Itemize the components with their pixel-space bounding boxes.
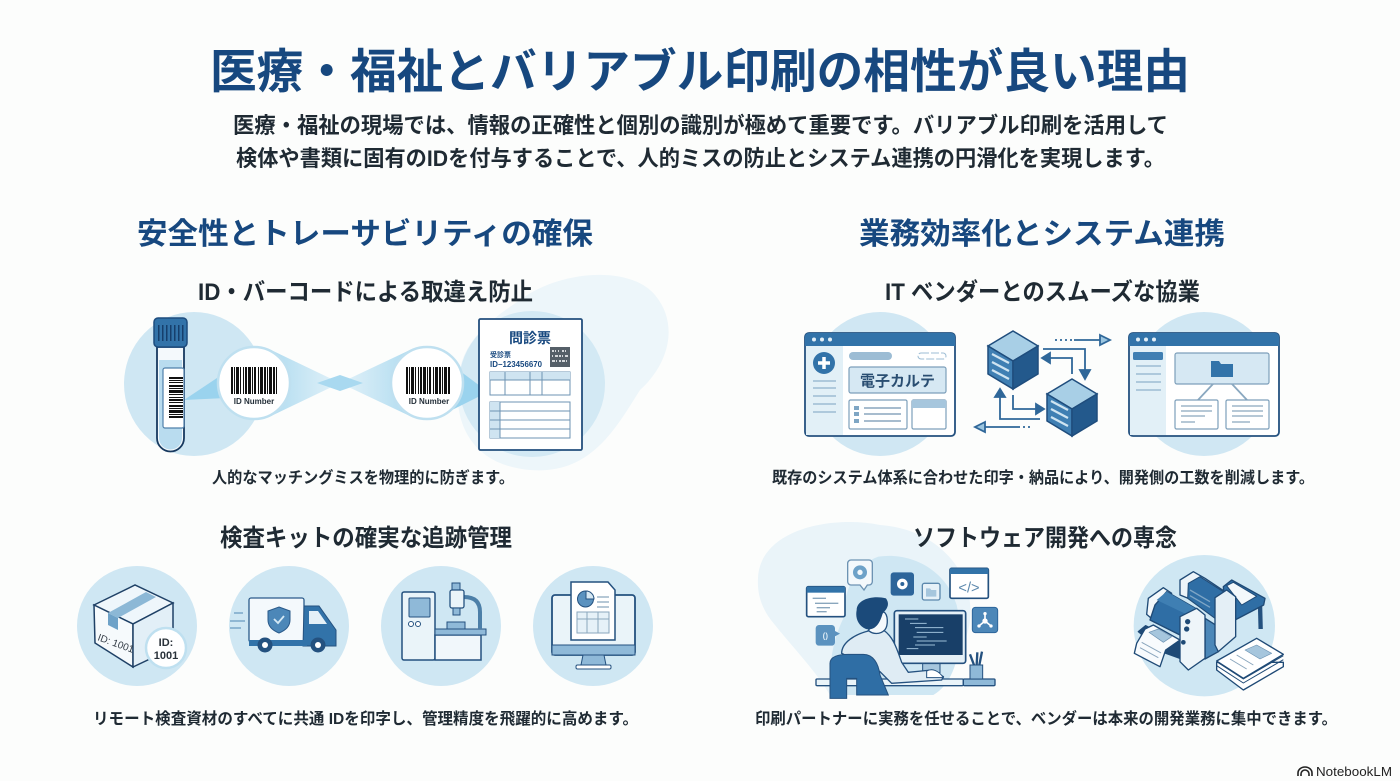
- subheading: test kit: 検査キットの確実な追跡管理: [220, 525, 512, 552]
- icon: questionnaire: 受診票: [490, 350, 511, 359]
- subheading: IT vendor: IT ベンダーとのスムーズな協業: [885, 278, 1200, 306]
- callout: barcode left: ID Number: [234, 397, 274, 406]
- illustration: developer: (): [823, 632, 828, 641]
- subheading: ID barcode: ID・バーコードによる取違え防止: [198, 279, 533, 306]
- callout: barcode left: [218, 347, 290, 419]
- illustration: developer: [807, 556, 998, 698]
- background blobs: [124, 275, 669, 470]
- panel: test kit tracking: [77, 525, 653, 728]
- intro text: [233, 113, 1168, 171]
- illustration: developer: </>: [958, 580, 980, 596]
- icon: delivery truck: [229, 566, 349, 686]
- heading: right column: 業務効率化とシステム連携: [859, 218, 1225, 251]
- background blob: developer: [758, 522, 971, 695]
- window: file system: [1129, 333, 1279, 436]
- window: electronic chart: 電子カルテ: [860, 373, 935, 390]
- intro text: 医療・福祉の現場では、情報の正確性と個別の識別が極めて重要です。バリアブル印刷を活用して: [233, 113, 1168, 138]
- background circles: [810, 312, 1274, 456]
- caption: software focus: 印刷パートナーに実務を任せることで、ベンダーは本来の開発業務に集中できます。: [755, 709, 1337, 728]
- logo: NotebookLM: NotebookLM: [1316, 764, 1392, 779]
- icon: analysis machine: [381, 566, 501, 686]
- icon: questionnaire: ID−123456670: [490, 360, 543, 369]
- panel: ID barcode: [124, 275, 669, 487]
- icon: data servers: [988, 331, 1097, 436]
- window: electronic chart: [805, 333, 955, 436]
- icon: package: ID: 1001: [96, 632, 136, 656]
- callout: barcode right: ID Number: [409, 397, 449, 406]
- icon: package: [77, 566, 197, 686]
- icon: test tube: [154, 318, 187, 452]
- light beams: [184, 349, 488, 417]
- icon: questionnaire: [479, 319, 582, 450]
- callout: barcode right: [391, 347, 463, 419]
- caption: IT vendor: 既存のシステム体系に合わせた印字・納品により、開発側の工数を削減します。: [772, 468, 1314, 487]
- panel: software focus: [755, 522, 1337, 728]
- icon: package: 1001: [154, 650, 178, 662]
- title: 医療・福祉とバリアブル印刷の相性が良い理由: [210, 45, 1190, 98]
- arrows: data exchange: [975, 335, 1110, 432]
- icon: package: ID:: [159, 637, 173, 649]
- caption: test kit: リモート検査資材のすべてに共通 IDを印字し、管理精度を飛躍的に高めます。: [93, 709, 638, 728]
- heading: left column: 安全性とトレーサビリティの確保: [137, 218, 593, 251]
- icon: questionnaire: 問診票: [509, 330, 551, 346]
- panel: IT vendor: [772, 278, 1314, 487]
- subheading: software focus: ソフトウェア開発への専念: [913, 525, 1177, 552]
- icon: monitor with report: [533, 566, 653, 686]
- illustration: printing press: [1134, 555, 1283, 696]
- intro text: 検体や書類に固有のIDを付与することで、人的ミスの防止とシステム連携の円滑化を実現します。: [236, 146, 1165, 171]
- caption: ID barcode: 人的なマッチングミスを物理的に防ぎます。: [212, 468, 514, 487]
